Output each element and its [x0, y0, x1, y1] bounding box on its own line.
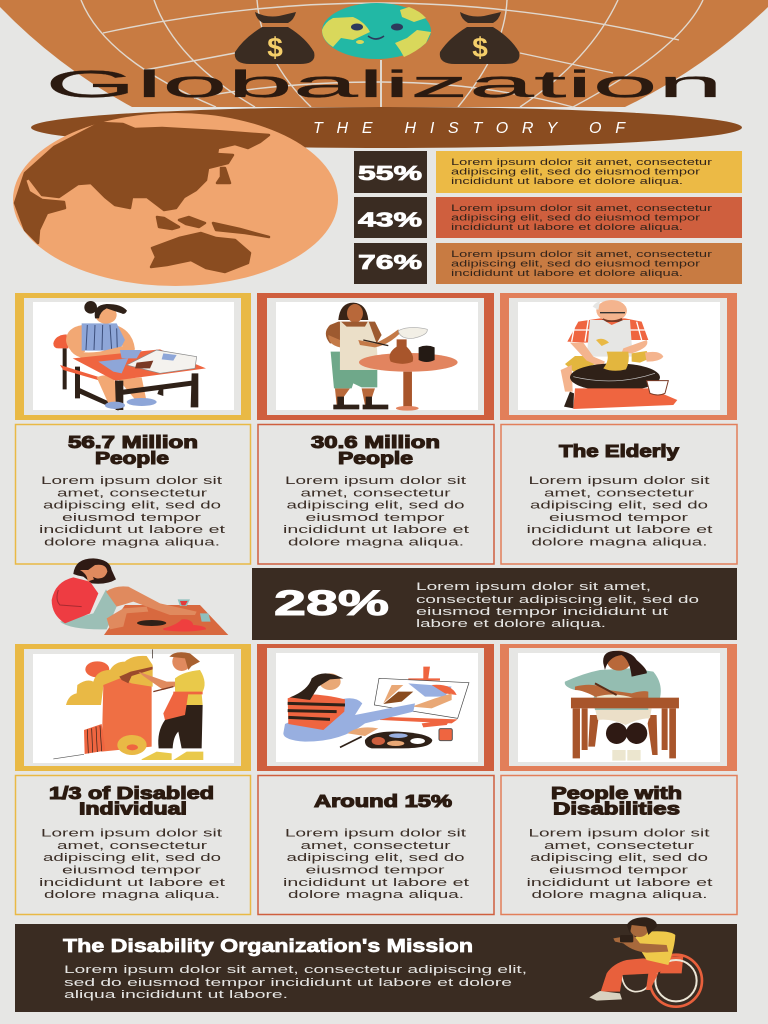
world globe — [13, 113, 338, 286]
text card: 30.6 million people — [258, 424, 494, 564]
text card: around 15%: dolore magna aliqua. — [288, 889, 464, 901]
stat row 76%: adipiscing elit, sed do eiusmod tempor — [451, 258, 700, 268]
mission banner: sed do eiusmod tempor incididunt ut labore et dolore — [64, 977, 512, 989]
header globe with grid — [0, 0, 768, 107]
text card: around 15%: Around 15% — [314, 791, 453, 811]
icon: money bag right: $ — [472, 32, 488, 63]
text card: 30.6 million people: dolore magna aliqua. — [288, 536, 464, 548]
icon: money bag right — [440, 12, 519, 64]
stat row 76%: 76% — [358, 251, 422, 274]
stat row 76%: Lorem ipsum dolor sit amet, consectetur — [451, 249, 712, 259]
text card: 56.7 million people: adipiscing elit, sed do — [43, 500, 221, 512]
text card: people with disabilities — [501, 776, 737, 914]
banner: 28%: eiusmod tempor incididunt ut — [416, 606, 670, 618]
text card: 1/3 of disabled individual: Individual — [79, 798, 187, 818]
text card: 30.6 million people: incididunt ut labore et — [283, 524, 471, 536]
text card: people with disabilities: eiusmod tempor — [549, 864, 688, 876]
icon: money bag left: $ — [267, 32, 283, 63]
text card: 56.7 million people: amet, consectetur — [57, 488, 207, 500]
banner: 28% — [252, 568, 737, 640]
image frame: woman painting vase — [257, 293, 494, 420]
text card: 1/3 of disabled individual: eiusmod tempor — [62, 864, 201, 876]
text card: around 15%: Lorem ipsum dolor sit — [285, 828, 467, 840]
text card: around 15%: amet, consectetur — [300, 840, 451, 852]
text card: the elderly: incididunt ut labore et — [526, 524, 714, 536]
banner: 28%: labore et dolore aliqua. — [416, 618, 606, 630]
stat row 55%: Lorem ipsum dolor sit amet, consectetur — [451, 157, 712, 167]
text card: the elderly: amet, consectetur — [544, 488, 694, 500]
text card: 1/3 of disabled individual: 1/3 of Disabled — [49, 783, 214, 803]
image frame: artist painting wall — [15, 644, 251, 771]
text card: 1/3 of disabled individual: adipiscing elit, sed do — [43, 852, 221, 864]
text card: people with disabilities: amet, consectetur — [544, 840, 694, 852]
text card: people with disabilities: dolore magna aliqua. — [532, 889, 708, 901]
text card: 56.7 million people: Lorem ipsum dolor sit — [41, 475, 223, 487]
text card: 56.7 million people: eiusmod tempor — [62, 512, 201, 524]
image frame: woman making collage — [15, 293, 251, 420]
icon: money bag left — [235, 12, 314, 64]
stat row 55%: adipiscing elit, sed do eiusmod tempor — [451, 166, 700, 176]
stat row 76%: incididunt ut labore et dolore aliqua. — [451, 268, 683, 278]
text card: people with disabilities: Lorem ipsum dolor sit — [528, 828, 711, 840]
text card: 1/3 of disabled individual: incididunt ut labore et — [39, 877, 227, 889]
stat row 43%: Lorem ipsum dolor sit amet, consectetur — [451, 203, 712, 213]
illustration: wheelchair photographer — [589, 917, 702, 1007]
text card: people with disabilities: Disabilities — [553, 798, 680, 818]
text card: 30.6 million people: 30.6 Million — [311, 432, 440, 452]
text card: people with disabilities: adipiscing elit, sed do — [530, 852, 708, 864]
stat row 43%: adipiscing elit, sed do eiusmod tempor — [451, 212, 700, 222]
stat row 43%: incididunt ut labore et dolore aliqua. — [451, 222, 683, 232]
text card: people with disabilities: incididunt ut labore et — [526, 877, 714, 889]
subtitle band — [31, 107, 742, 148]
image frame: woman at table — [500, 644, 737, 771]
stat row 76% — [354, 243, 742, 284]
stat row 55%: 55% — [358, 162, 422, 185]
banner: 28%: Lorem ipsum dolor sit amet, — [416, 581, 651, 593]
text card: the elderly: dolore magna aliqua. — [532, 536, 708, 548]
text card: the elderly: Lorem ipsum dolor sit — [528, 475, 711, 487]
text card: 30.6 million people: People — [338, 448, 413, 468]
image frame: woman at easel — [257, 644, 494, 771]
stat row 43%: 43% — [358, 208, 422, 232]
text card: around 15% — [258, 776, 494, 914]
text card: around 15%: adipiscing elit, sed do — [286, 852, 464, 864]
text card: 30.6 million people: eiusmod tempor — [306, 512, 445, 524]
text card: the elderly — [501, 424, 737, 564]
subtitle band: THE HISTORY OF — [313, 120, 626, 137]
illustration: seated woman painting with feet — [52, 558, 228, 635]
text card: 56.7 million people: 56.7 Million — [68, 432, 198, 452]
stat row 43% — [354, 197, 742, 238]
banner: 28%: consectetur adipiscing elit, sed do — [416, 594, 699, 606]
text card: around 15%: eiusmod tempor — [306, 864, 445, 876]
image frame: elderly potter — [500, 293, 737, 420]
text card: 1/3 of disabled individual: Lorem ipsum dolor sit — [41, 828, 223, 840]
text card: 1/3 of disabled individual — [16, 776, 250, 914]
mission banner: The Disability Organization's Mission — [63, 936, 473, 956]
banner: 28%: 28% — [274, 584, 389, 623]
text card: 30.6 million people: adipiscing elit, sed do — [286, 500, 464, 512]
text card: 30.6 million people: amet, consectetur — [300, 488, 451, 500]
mission banner: aliqua incididunt ut labore. — [64, 989, 288, 1001]
icon: smiling earth — [322, 3, 431, 59]
stat row 55%: incididunt ut labore et dolore aliqua. — [451, 176, 683, 186]
title: Globalization — [45, 64, 723, 106]
stat row 55% — [354, 151, 742, 193]
text card: the elderly: eiusmod tempor — [549, 512, 688, 524]
text card: 1/3 of disabled individual: dolore magna aliqua. — [44, 889, 220, 901]
text card: the elderly: adipiscing elit, sed do — [530, 500, 708, 512]
mission banner — [15, 924, 737, 1012]
text card: 56.7 million people: incididunt ut labore et — [39, 524, 227, 536]
mission banner: Lorem ipsum dolor sit amet, consectetur adipiscing elit, — [64, 964, 527, 976]
text card: 1/3 of disabled individual: amet, consectetur — [57, 840, 207, 852]
text card: 56.7 million people: dolore magna aliqua. — [44, 536, 220, 548]
text card: 30.6 million people: Lorem ipsum dolor sit — [285, 475, 467, 487]
text card: the elderly: The Elderly — [559, 441, 679, 461]
text card: around 15%: incididunt ut labore et — [283, 877, 471, 889]
text card: people with disabilities: People with — [551, 783, 682, 803]
text card: 56.7 million people: People — [95, 448, 169, 468]
text card: 56.7 million people — [16, 424, 250, 564]
